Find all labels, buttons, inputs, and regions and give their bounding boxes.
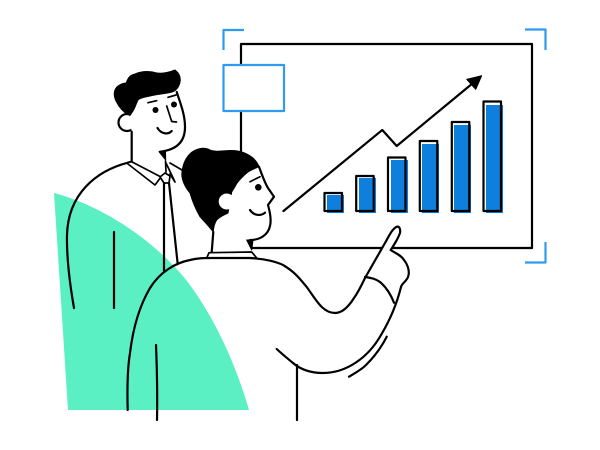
man smile [158,128,172,133]
woman cuff [365,277,394,303]
blue corner brackets [224,30,546,262]
man right shoulder [170,163,182,170]
woman ear [219,194,235,210]
man ear [118,114,136,131]
man brows and nose [148,95,176,122]
man collar [127,161,175,185]
man shoulders and arm [67,162,132,308]
man tie [164,183,178,271]
woman smile [250,210,265,215]
woman arm line [156,345,157,420]
pointing hand fill [365,227,409,303]
woman body and arm outline [127,227,409,410]
man hair [114,70,180,116]
woman brow [250,177,260,182]
woman eye [255,184,262,191]
woman hair [182,148,259,232]
man face [128,91,185,162]
man figure [67,70,185,308]
woman chin shadow [247,240,253,250]
woman torso side line [296,365,298,420]
woman collar [207,252,257,258]
woman face [212,167,274,252]
trend arrow [284,76,482,211]
man chin shadow [159,150,166,160]
man eyes [152,107,158,113]
woman sleeve fold [349,337,387,377]
blue note box [224,65,284,111]
woman figure [127,148,409,420]
green background shape [54,193,249,410]
woman neck [212,232,213,252]
presentation board [241,44,532,248]
bar chart [324,102,503,213]
